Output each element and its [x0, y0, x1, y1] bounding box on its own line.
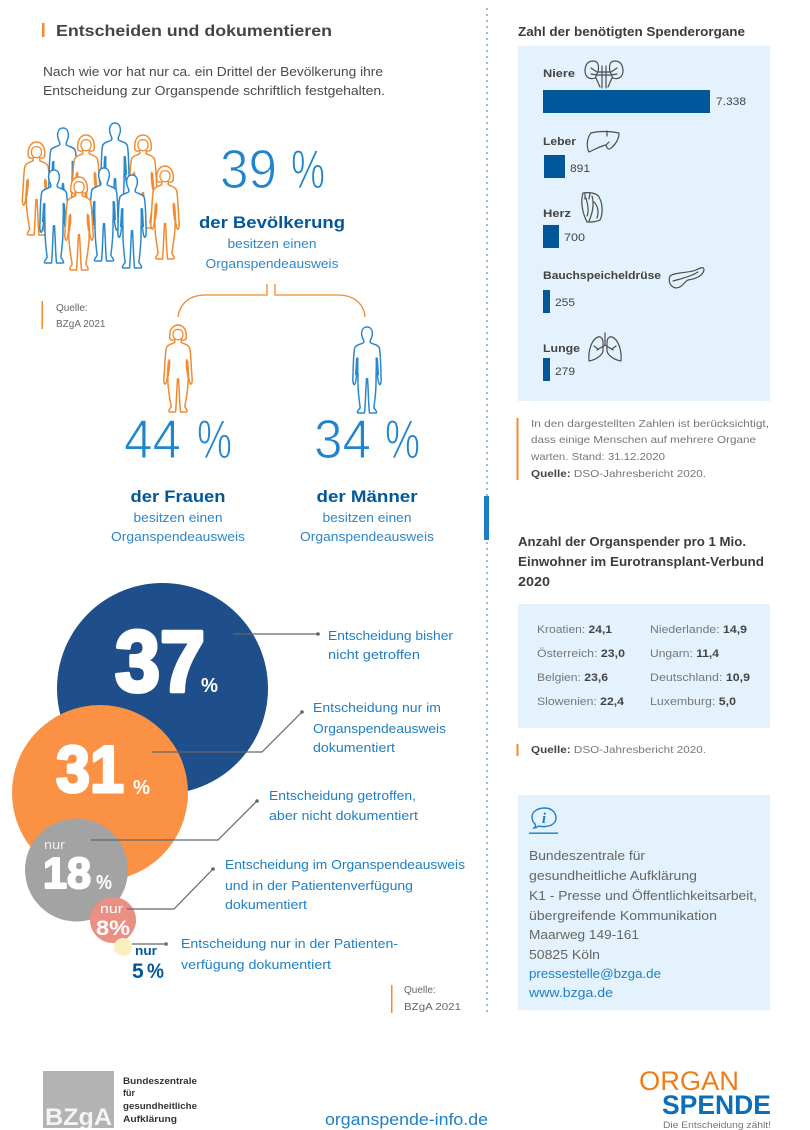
- bar: Herz: [543, 208, 585, 248]
- callout: 18 percent decided not documented: aber nicht dokumentiert: [269, 809, 419, 823]
- table: countries: Ungarn: 11,4: [650, 648, 720, 660]
- callout: 31 percent donor card only: dokumentiert: [313, 741, 396, 755]
- logo: Organspende: ORGAN: [639, 1066, 739, 1096]
- heading: Zahl der benötigten Spenderorgane: Zahl der benötigten Spenderorgane: [518, 25, 745, 39]
- website link: organspende-info.de: [325, 1110, 488, 1129]
- icon: kidneys: [585, 61, 623, 88]
- heading: donors per million: Einwohner im Eurotransplant-Verbund: [518, 555, 764, 569]
- circle: 31 percent: %: [133, 777, 150, 799]
- bar: Niere: Niere: [543, 68, 575, 80]
- table: countries: Kroatien: 24,1: [537, 624, 612, 636]
- table: countries: Belgien: 23,6: [537, 672, 608, 684]
- circle: 31 percent: 31: [56, 732, 124, 806]
- heading: donors per million: Anzahl der Organspender pro 1 Mio.: [518, 535, 746, 549]
- bar: Herz: Herz: [543, 208, 572, 220]
- callout: 5 percent living will only: verfügung dokumentiert: [181, 958, 332, 972]
- icon: liver: [587, 131, 619, 152]
- callout: 8 percent card and living will: Entscheidung im Organspendeausweis: [225, 858, 465, 872]
- callout: 37 percent not decided: nicht getroffen: [328, 648, 420, 662]
- contact address: übergreifende Kommunikation: [529, 909, 717, 923]
- circle: 18 percent: [25, 818, 128, 922]
- statistic: 39 percent of population: Organspendeausweis: [206, 257, 338, 271]
- statistic: 39 percent of population: 39: [220, 138, 277, 200]
- callout: 37 percent not decided: Entscheidung bisher: [328, 629, 453, 643]
- heading: Entscheiden und dokumentieren: Entscheiden und dokumentieren: [56, 23, 332, 40]
- icon: lungs: [589, 333, 621, 361]
- logo: BZgA: gesundheitliche: [123, 1101, 197, 1111]
- source: BZgA 2021 bottom: [391, 985, 462, 1013]
- contact address: gesundheitliche Aufklärung: [529, 869, 697, 883]
- circle: 18 percent: 18: [43, 849, 91, 898]
- bar: Herz: 700: [564, 232, 585, 244]
- bar: Leber: 891: [570, 163, 590, 175]
- bar: Lunge: 279: [555, 366, 575, 378]
- statistic: women 44 percent: der Frauen: [130, 487, 226, 506]
- circle: 18 percent: nur: [44, 837, 66, 852]
- table: countries: Luxemburg: 5,0: [650, 696, 736, 708]
- statistic: women 44 percent: Organspendeausweis: [111, 530, 245, 544]
- logo: BZgA: [43, 1071, 197, 1130]
- source: BZgA 2021: Quelle:: [56, 303, 88, 314]
- statistic: men 34 percent: %: [385, 408, 420, 470]
- circle: 8 percent: nur: [100, 901, 124, 916]
- contact address: www.bzga.de: [528, 986, 613, 1000]
- source: BZgA 2021: [42, 301, 106, 330]
- callout: 8 percent card and living will: [127, 858, 465, 912]
- note: organ figures: dass einige Menschen auf mehrere Organe: [531, 434, 756, 446]
- contact address: Maarweg 149-161: [529, 928, 639, 942]
- note: organ figures: warten. Stand: 31.12.2020: [530, 451, 665, 463]
- circle: 18 percent: %: [96, 872, 112, 894]
- callout: 18 percent decided not documented: Entscheidung getroffen,: [269, 789, 416, 803]
- icon: pancreas: [669, 268, 704, 288]
- statistic: men 34 percent: besitzen einen: [322, 511, 412, 525]
- icon: info speech bubble: [529, 808, 558, 834]
- panel: required donor organs: [518, 25, 770, 401]
- callout: 8 percent card and living will: dokumentiert: [225, 898, 308, 912]
- circle: 8 percent: 8%: [96, 917, 130, 940]
- logo: BZgA: für: [123, 1088, 135, 1098]
- contact address: Bundeszentrale für: [529, 849, 645, 863]
- table: countries: Österreich: 23,0: [537, 648, 625, 660]
- bar: Bauchspeicheldrüse: 255: [555, 297, 575, 309]
- contact address: K1 - Presse und Öffentlichkeitsarbeit,: [529, 889, 757, 903]
- statistic: 39 percent of population: %: [291, 138, 325, 200]
- statistic: men 34 percent: der Männer: [316, 487, 418, 506]
- callout: 8 percent card and living will: und in der Patientenverfügung: [225, 879, 413, 893]
- callout: 31 percent donor card only: Entscheidung nur im: [313, 701, 441, 715]
- note: organ figures: [516, 418, 769, 480]
- callout: 18 percent decided not documented: [91, 789, 419, 840]
- bar: Leber: [543, 136, 590, 178]
- icon: heart: [582, 193, 602, 222]
- contact address: 50825 Köln: [529, 948, 600, 962]
- icon: info speech bubble: i: [542, 811, 547, 827]
- bar: Niere: [543, 68, 746, 113]
- chart: nested circles with decision shares: [12, 583, 268, 983]
- logo: BZgA: Aufklärung: [123, 1114, 177, 1124]
- source: BZgA 2021: BZgA 2021: [56, 319, 106, 330]
- bar: Bauchspeicheldrüse: [543, 270, 661, 313]
- heading: donors per million: 2020: [518, 575, 550, 589]
- callout: 5 percent living will only: [132, 937, 398, 972]
- statistic: women 44 percent: %: [197, 408, 232, 470]
- source: DSO: Quelle: DSO-Jahresbericht 2020.: [531, 744, 706, 756]
- callout: 31 percent donor card only: [152, 701, 446, 755]
- note: organ figures: Quelle: DSO-Jahresbericht 2020.: [531, 468, 706, 480]
- column divider: [484, 8, 489, 1015]
- callout: 31 percent donor card only: Organspendeausweis: [313, 722, 446, 736]
- circle: 5 percent: nur: [135, 943, 157, 958]
- statistic: women 44 percent: [111, 325, 245, 544]
- bar: Leber: Leber: [543, 136, 577, 148]
- bracket connector: [178, 284, 365, 317]
- source: BZgA 2021 bottom: Quelle:: [404, 985, 436, 996]
- statistic: women 44 percent: besitzen einen: [134, 511, 223, 525]
- bar: Lunge: Lunge: [543, 343, 580, 355]
- note: organ figures: In den dargestellten Zahlen ist berücksichtigt,: [531, 418, 769, 430]
- logo: Organspende: Die Entscheidung zählt!: [663, 1120, 771, 1130]
- contact address: [528, 849, 757, 1000]
- bar: Bauchspeicheldrüse: Bauchspeicheldrüse: [543, 270, 661, 282]
- circle: 8 percent: [90, 897, 136, 943]
- bar: Lunge: [543, 343, 580, 381]
- statistic: women 44 percent: 44: [124, 408, 181, 470]
- table: countries: Deutschland: 10,9: [650, 672, 750, 684]
- panel: donors per million inhabitants: [516, 535, 770, 756]
- icon: group of people: [22, 123, 179, 270]
- statistic: 39 percent of population: der Bevölkerung: [199, 213, 345, 232]
- statistic: men 34 percent: [300, 327, 434, 544]
- panel: contact information: [518, 795, 770, 1010]
- circle: 5 percent: [114, 938, 164, 983]
- circle: 37 percent: %: [201, 675, 218, 697]
- table: countries: Niederlande: 14,9: [650, 624, 747, 636]
- callout: 5 percent living will only: Entscheidung nur in der Patienten-: [181, 937, 398, 951]
- statistic: 39 percent of population: besitzen einen: [228, 237, 317, 251]
- contact address: pressestelle@bzga.de: [529, 967, 661, 981]
- source: BZgA 2021 bottom: BZgA 2021: [404, 1002, 462, 1013]
- bar: Niere: 7.338: [716, 96, 746, 108]
- heading: donors per million: [518, 535, 764, 589]
- intro text: [43, 65, 385, 98]
- table: countries: [518, 604, 770, 728]
- circle: 5 percent: %: [147, 960, 164, 983]
- bar chart: organs: [518, 46, 770, 401]
- statistic: men 34 percent: Organspendeausweis: [300, 530, 434, 544]
- table: countries: Slowenien: 22,4: [537, 696, 625, 708]
- circle: 31 percent: [12, 705, 188, 881]
- statistic: 39 percent of population: [199, 138, 345, 271]
- panel: left column decision and documentation: [12, 23, 465, 1013]
- statistic: men 34 percent: 34: [314, 408, 371, 470]
- circle: 37 percent: [57, 583, 268, 794]
- circle: 5 percent: 5: [132, 960, 144, 983]
- callout: 37 percent not decided: [233, 629, 453, 662]
- intro text: Entscheidung zur Organspende schriftlich festgehalten.: [43, 84, 385, 98]
- intro text: Nach wie vor hat nur ca. ein Drittel der Bevölkerung ihre: [43, 65, 383, 79]
- footer: [43, 1066, 771, 1130]
- logo: Organspende: [639, 1066, 771, 1130]
- logo: BZgA: Bundeszentrale: [123, 1076, 197, 1086]
- logo: Organspende: SPENDE: [662, 1090, 771, 1120]
- circle: 37 percent: 37: [115, 614, 205, 710]
